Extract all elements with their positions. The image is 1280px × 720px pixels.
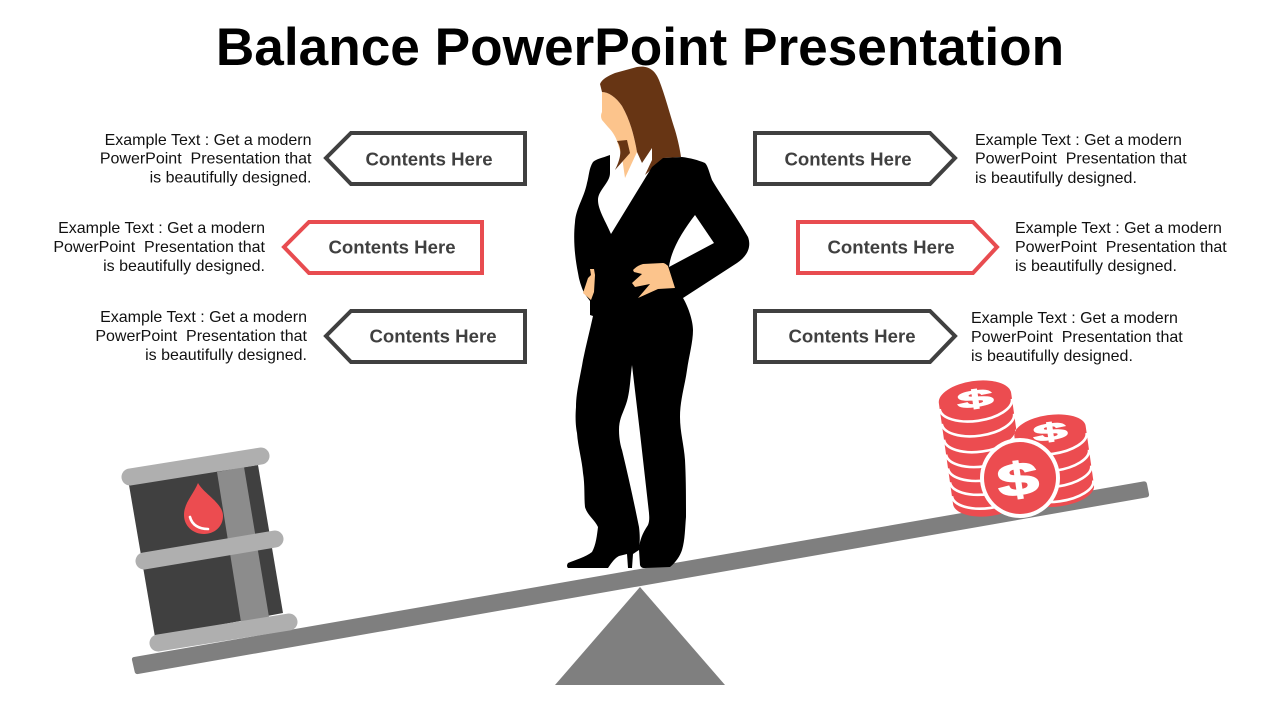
description: Example Text : Get a modern [105,132,312,149]
description: is beautifully designed. [150,170,312,186]
icon: dollar coin stacks [936,376,1096,521]
left item 2 [53,220,482,275]
barrel bands [130,456,289,643]
description: is beautifully designed. [103,258,265,275]
businesswoman figure [567,67,749,568]
icon: oil barrel [129,456,289,643]
face and neck [601,92,637,178]
description: PowerPoint Presentation that [95,328,308,345]
right coin stack [1012,410,1096,511]
description: PowerPoint Presentation that [53,239,266,256]
arm gap [669,215,714,267]
right item 2 [798,220,1227,275]
description: Example Text : Get a modern [58,220,265,237]
description: PowerPoint Presentation that [971,329,1183,346]
description: PowerPoint Presentation that [1015,239,1227,256]
barrel body [129,465,283,637]
left coin stack [936,376,1028,521]
hair [600,67,681,175]
hair lock [615,140,630,170]
label: Contents Here [788,326,916,346]
title: Balance PowerPoint Presentation [216,18,1064,77]
right hand [632,263,675,298]
front coin: $ [994,451,1042,508]
seesaw beam [132,481,1149,674]
description: Example Text : Get a modern [975,132,1182,149]
description: PowerPoint Presentation that [100,150,312,168]
label: Contents Here [365,148,493,170]
barrel stripe [217,467,269,622]
left hand [583,269,595,300]
description: is beautifully designed. [971,348,1133,365]
description: is beautifully designed. [1015,258,1177,275]
arrow box [284,222,482,273]
label: Contents Here [784,148,912,170]
label: Contents Here [827,236,955,258]
left item 1 [100,132,525,186]
description: Example Text : Get a modern [971,310,1178,327]
arrow box [798,222,997,273]
jacket and pants [567,155,749,568]
right item 1 [755,132,1187,187]
arrow box [326,311,525,362]
seesaw fulcrum [555,587,725,685]
front coin [980,438,1060,518]
icon: oil drop [184,483,223,534]
description: is beautifully designed. [145,347,307,364]
left item 3 [95,309,525,364]
leg gap [619,365,649,548]
arrow box [326,133,525,184]
arrow box [755,133,955,184]
right item 3 [755,310,1183,365]
label: Contents Here [369,326,497,346]
arrow box [755,311,955,362]
label: Contents Here [328,236,456,258]
right coin stack: $ [1031,416,1069,447]
description: Example Text : Get a modern [100,309,307,326]
description: is beautifully designed. [975,170,1137,187]
left coin stack: $ [956,384,995,415]
description: PowerPoint Presentation that [975,150,1187,168]
description: Example Text : Get a modern [1015,220,1222,237]
